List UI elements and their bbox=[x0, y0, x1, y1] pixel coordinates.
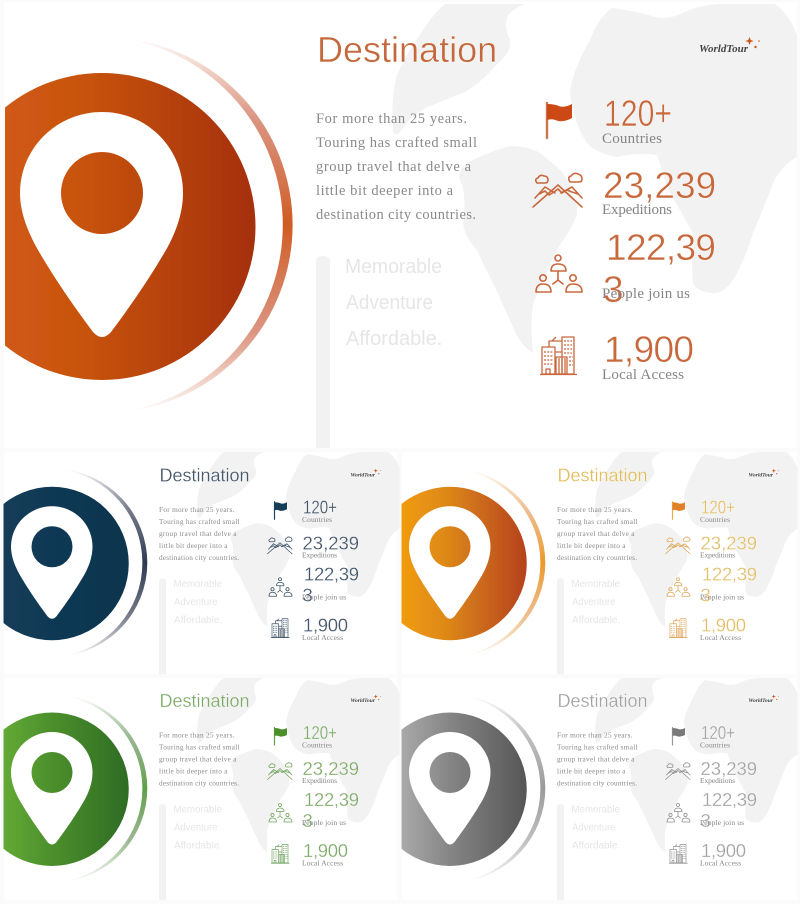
slide: amber variant bbox=[373, 452, 798, 674]
stat: countries: Countries bbox=[302, 740, 332, 750]
list of attributes: Affordable. bbox=[346, 328, 442, 350]
logo: WorldTour bbox=[748, 473, 773, 478]
body text: Touring has crafted small bbox=[557, 744, 638, 752]
body text bbox=[557, 506, 638, 562]
stat: people: 3 bbox=[302, 584, 313, 605]
stat: expeditions: 23,239 bbox=[302, 758, 359, 779]
body text: group travel that delve a bbox=[159, 756, 237, 764]
body text: Touring has crafted small bbox=[159, 518, 240, 526]
vertical bar bbox=[159, 804, 166, 900]
stat: people: 122,39 bbox=[702, 789, 757, 810]
list of attributes bbox=[174, 804, 222, 852]
list of attributes: Affordable. bbox=[572, 615, 620, 626]
body text: little bit deeper into a bbox=[159, 542, 228, 550]
list of attributes: Adventure bbox=[572, 822, 616, 834]
icon: people bbox=[536, 255, 582, 292]
list of attributes bbox=[572, 579, 620, 626]
stat: countries bbox=[700, 722, 735, 750]
vertical bar bbox=[557, 804, 564, 900]
location circle bbox=[402, 486, 527, 640]
body text: little bit deeper into a bbox=[557, 768, 626, 776]
body text bbox=[316, 111, 477, 223]
stat: local access: 1,900 bbox=[701, 614, 746, 635]
stat: local access: 1,900 bbox=[303, 840, 348, 861]
stat: people bbox=[302, 563, 359, 605]
logo bbox=[350, 469, 381, 478]
stat: people: 3 bbox=[700, 584, 711, 605]
icon: mountains bbox=[666, 763, 690, 780]
body text: group travel that delve a bbox=[557, 530, 635, 538]
body text: group travel that delve a bbox=[316, 159, 472, 175]
stat: people: 3 bbox=[700, 810, 711, 831]
stat: people bbox=[700, 789, 757, 831]
list of attributes: Adventure bbox=[174, 597, 218, 608]
icon: mountains bbox=[533, 173, 582, 207]
icon: people bbox=[667, 578, 690, 596]
stat: countries: 120+ bbox=[701, 496, 735, 517]
stat: countries: 120+ bbox=[604, 93, 672, 134]
body text: For more than 25 years. bbox=[159, 732, 235, 740]
list of attributes: Memorable bbox=[572, 804, 620, 816]
logo bbox=[699, 37, 760, 55]
icon: flag bbox=[274, 728, 287, 745]
list of attributes: Memorable bbox=[572, 579, 620, 590]
title: Destination bbox=[160, 691, 250, 711]
slide: orange main bbox=[0, 2, 797, 448]
stat: expeditions: Expeditions bbox=[302, 776, 337, 785]
stat: people: 122,39 bbox=[702, 563, 757, 584]
stat: expeditions: 23,239 bbox=[302, 532, 359, 553]
body text: destination city countries. bbox=[159, 780, 239, 788]
stat: people: People join us bbox=[302, 818, 346, 827]
stat: countries bbox=[302, 496, 337, 524]
stat: people: 3 bbox=[302, 810, 313, 831]
stat: countries: Countries bbox=[700, 740, 730, 750]
icon: mountains bbox=[666, 537, 690, 554]
icon: buildings bbox=[540, 337, 577, 374]
body text: little bit deeper into a bbox=[159, 768, 228, 776]
icon: mountains bbox=[268, 763, 292, 780]
list of attributes: Adventure bbox=[174, 822, 218, 834]
body text bbox=[159, 732, 240, 788]
body text: little bit deeper into a bbox=[557, 542, 626, 550]
body text: destination city countries. bbox=[557, 554, 637, 562]
stat: countries: 120+ bbox=[303, 496, 337, 517]
body text: Touring has crafted small bbox=[316, 135, 477, 151]
stat: expeditions: Expeditions bbox=[700, 776, 735, 785]
list of attributes: Memorable bbox=[174, 579, 222, 590]
title: Destination bbox=[558, 691, 648, 711]
icon: mountains bbox=[268, 537, 292, 554]
stat: people: People join us bbox=[700, 818, 744, 827]
list of attributes: Affordable. bbox=[174, 615, 222, 626]
logo bbox=[350, 694, 381, 704]
body text: group travel that delve a bbox=[557, 756, 635, 764]
stat: local access: 1,900 bbox=[604, 329, 694, 370]
stat: local access: Local Access bbox=[700, 858, 741, 868]
body text: For more than 25 years. bbox=[557, 732, 633, 740]
stat: people: People join us bbox=[602, 286, 690, 302]
stat: countries: 120+ bbox=[701, 722, 735, 743]
stat: expeditions: 23,239 bbox=[603, 165, 716, 206]
body text: Touring has crafted small bbox=[557, 518, 638, 526]
stat: countries: Countries bbox=[302, 515, 332, 524]
icon: people bbox=[667, 804, 690, 822]
stat: expeditions: 23,239 bbox=[700, 532, 757, 553]
location circle bbox=[402, 712, 527, 866]
title: Destination bbox=[160, 465, 250, 485]
slide: grey variant bbox=[373, 678, 798, 900]
body text: group travel that delve a bbox=[159, 530, 237, 538]
title: Destination bbox=[558, 465, 648, 485]
body text: destination city countries. bbox=[159, 554, 239, 562]
slide: green variant bbox=[0, 678, 400, 900]
stat: local access: Local Access bbox=[302, 858, 343, 868]
stat: local access: 1,900 bbox=[701, 840, 746, 861]
logo: WorldTour bbox=[350, 699, 375, 704]
body text bbox=[159, 506, 240, 562]
vertical bar bbox=[159, 578, 166, 674]
stat: local access: Local Access bbox=[302, 633, 343, 642]
stat: countries: 120+ bbox=[303, 722, 337, 743]
body text: destination city countries. bbox=[557, 780, 637, 788]
location circle bbox=[0, 487, 129, 640]
stat: people bbox=[602, 227, 716, 310]
body text: For more than 25 years. bbox=[557, 506, 633, 514]
stat: expeditions: Expeditions bbox=[602, 202, 672, 218]
gradient ring arc bbox=[61, 469, 147, 656]
vertical bar bbox=[557, 578, 564, 674]
icon: people bbox=[269, 804, 292, 822]
stat: people: People join us bbox=[302, 592, 346, 601]
icon: flag bbox=[547, 103, 572, 138]
body text: Touring has crafted small bbox=[159, 744, 240, 752]
icon: flag bbox=[274, 502, 287, 519]
body text: For more than 25 years. bbox=[159, 506, 235, 514]
gradient ring arc bbox=[120, 38, 293, 412]
list of attributes: Memorable bbox=[174, 804, 222, 816]
logo bbox=[748, 694, 779, 704]
list of attributes: Affordable. bbox=[572, 840, 620, 852]
title: Destination bbox=[317, 29, 497, 70]
gradient ring arc bbox=[459, 695, 545, 882]
icon: buildings bbox=[669, 619, 688, 638]
list of attributes: Adventure bbox=[572, 597, 616, 608]
list of attributes bbox=[572, 804, 620, 852]
stat: people: 122,39 bbox=[304, 563, 359, 584]
logo: WorldTour bbox=[699, 44, 748, 55]
list of attributes: Adventure bbox=[346, 292, 433, 314]
stat: people: People join us bbox=[700, 592, 744, 601]
list of attributes bbox=[345, 256, 442, 350]
list of attributes: Affordable. bbox=[174, 840, 222, 852]
icon: buildings bbox=[271, 619, 290, 638]
stat: expeditions: 23,239 bbox=[700, 758, 757, 779]
stat: local access: Local Access bbox=[602, 367, 684, 383]
body text: little bit deeper into a bbox=[316, 183, 454, 199]
stat: people bbox=[302, 789, 359, 831]
logo: WorldTour bbox=[350, 473, 375, 478]
location circle bbox=[0, 73, 256, 380]
list of attributes: Memorable bbox=[345, 256, 442, 278]
vertical bar bbox=[316, 256, 330, 448]
stat: people: 122,39 bbox=[606, 227, 716, 268]
stat: countries bbox=[302, 722, 337, 750]
icon: buildings bbox=[271, 844, 290, 863]
stat: expeditions: Expeditions bbox=[302, 550, 337, 559]
icon: flag bbox=[672, 502, 685, 519]
stat: people bbox=[700, 563, 757, 605]
icon: flag bbox=[672, 728, 685, 745]
gradient ring arc bbox=[459, 469, 545, 656]
stat: countries bbox=[602, 93, 672, 147]
stat: countries: Countries bbox=[700, 515, 730, 524]
stat: countries: Countries bbox=[602, 131, 662, 147]
icon: buildings bbox=[669, 844, 688, 863]
stat: local access: Local Access bbox=[700, 633, 741, 642]
body text bbox=[557, 732, 638, 788]
list of attributes bbox=[174, 579, 222, 626]
stat: expeditions: Expeditions bbox=[700, 550, 735, 559]
slide: navy variant bbox=[0, 452, 400, 674]
icon: people bbox=[269, 578, 292, 596]
stat: countries bbox=[700, 496, 735, 524]
stat: people: 122,39 bbox=[304, 789, 359, 810]
body text: For more than 25 years. bbox=[316, 111, 467, 127]
logo: WorldTour bbox=[748, 699, 773, 704]
logo bbox=[748, 469, 779, 478]
stat: people: 3 bbox=[603, 269, 624, 310]
body text: destination city countries. bbox=[316, 207, 476, 223]
location circle bbox=[0, 712, 129, 866]
stat: local access: 1,900 bbox=[303, 614, 348, 635]
gradient ring arc bbox=[61, 695, 147, 882]
